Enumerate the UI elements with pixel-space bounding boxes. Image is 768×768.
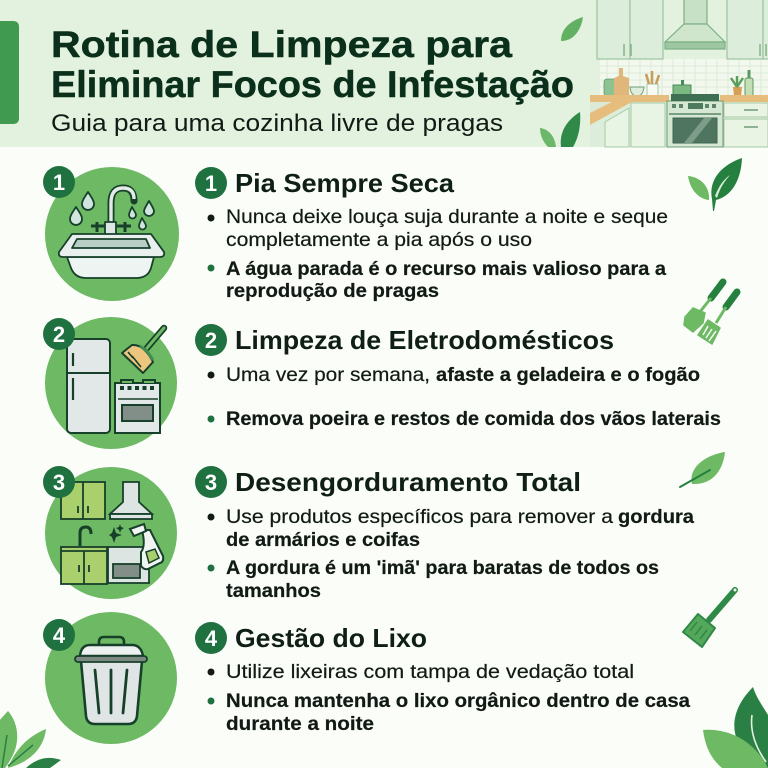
bullet list: Utilize lixeiras com tampa de vedação total <box>226 661 634 683</box>
sparkles <box>109 524 124 543</box>
badge: 3: 3 <box>53 470 65 495</box>
subtitle: Guia para uma cozinha livre de pragas <box>51 110 503 137</box>
badge: 1 <box>43 166 75 198</box>
bullet list: Uma vez por semana, <box>226 364 430 386</box>
hood <box>665 0 725 49</box>
title: Eliminar Focos de Infestação <box>51 64 574 105</box>
lid <box>80 645 143 656</box>
spray bottle <box>130 524 163 569</box>
bullet list: durante a noite <box>226 713 374 735</box>
section 2: Limpeza de Eletrodomésticos: 2 <box>205 328 217 353</box>
heading: Limpeza de Eletrodomésticos <box>235 325 614 355</box>
bullet list: reprodução de pragas <box>226 280 439 302</box>
section 1: Pia Sempre Seca <box>195 167 668 302</box>
can body <box>81 661 142 724</box>
section 4: Gestão do Lixo: 4 <box>205 626 218 651</box>
section 4: Gestão do Lixo <box>195 622 690 735</box>
icon: header leaf top <box>561 17 583 41</box>
section number <box>195 324 227 356</box>
section number <box>195 167 227 199</box>
section number <box>195 466 227 498</box>
bullet list: Nunca deixe louça suja durante a noite e seque <box>226 206 668 228</box>
icon: single leaf right <box>680 452 725 487</box>
heading: Gestão do Lixo <box>235 623 427 653</box>
section 1: Pia Sempre Seca: 1 <box>205 171 217 196</box>
hood <box>110 482 152 519</box>
icon: spatula <box>683 588 736 647</box>
bullet list: afaste a geladeira e o fogão <box>436 364 700 386</box>
accent tab <box>0 21 19 124</box>
section 2: Limpeza de Eletrodomésticos <box>195 324 721 430</box>
illustration: fridge and stove <box>45 317 177 449</box>
illustration: kitchen <box>590 0 768 147</box>
water drops <box>70 192 154 230</box>
bullet list: gordura <box>618 506 694 528</box>
bullet list <box>208 506 694 602</box>
broom <box>122 328 164 373</box>
panel: header <box>0 0 768 147</box>
section 3: Desengorduramento Total: 3 <box>205 470 217 495</box>
bullet list <box>208 364 721 430</box>
fridge <box>67 339 110 433</box>
lower cabinets and faucet <box>61 527 107 584</box>
badge: 4: 4 <box>53 623 66 648</box>
bullet list: de armários e coifas <box>226 529 420 551</box>
badge: 1: 1 <box>53 170 65 195</box>
bullet list: A gordura é um 'imã' para baratas de todos os <box>226 557 659 579</box>
bullet list <box>208 206 668 302</box>
badge: 3 <box>43 466 75 498</box>
bullet list: tamanhos <box>226 580 321 602</box>
counter <box>590 95 669 125</box>
badge: 2: 2 <box>53 322 65 347</box>
icon: leaves bottom left <box>0 711 61 768</box>
oven <box>108 547 149 583</box>
title <box>51 24 574 105</box>
badge: 2 <box>43 318 75 350</box>
icon: two spatulas <box>684 282 737 344</box>
bullet list <box>208 661 690 735</box>
icon: leaves bottom right <box>703 687 768 768</box>
section number <box>195 622 227 654</box>
upper cabinets <box>61 482 105 519</box>
counter items <box>604 68 753 97</box>
bullet list: Nunca mantenha o lixo orgânico dentro de casa <box>226 690 690 712</box>
upper cabinets <box>597 0 768 59</box>
stove <box>115 380 160 433</box>
backsplash <box>600 59 768 95</box>
lower cabinets <box>590 102 667 147</box>
bullet list: completamente a pia após o uso <box>226 229 532 251</box>
stove <box>667 94 723 147</box>
heading: Desengorduramento Total <box>235 467 581 497</box>
faucet <box>111 188 134 226</box>
illustration: trash can <box>45 612 177 744</box>
icon: header leaves bottom <box>540 112 580 147</box>
bullet list: Remova poeira e restos de comida dos vãos laterais <box>226 408 721 430</box>
illustration: sink <box>45 167 179 301</box>
icon: leaf pair right <box>688 158 742 211</box>
bullet list: A água parada é o recurso mais valioso para a <box>226 258 666 280</box>
lid handle <box>99 637 124 644</box>
badge: 4 <box>43 619 75 651</box>
basin <box>67 257 154 278</box>
heading: Pia Sempre Seca <box>235 168 455 198</box>
title: Rotina de Limpeza para <box>51 24 512 65</box>
illustration: kitchen cleaning <box>45 467 177 599</box>
section 3: Desengorduramento Total <box>195 466 694 602</box>
bullet list: Use produtos específicos para remover a <box>226 506 613 528</box>
